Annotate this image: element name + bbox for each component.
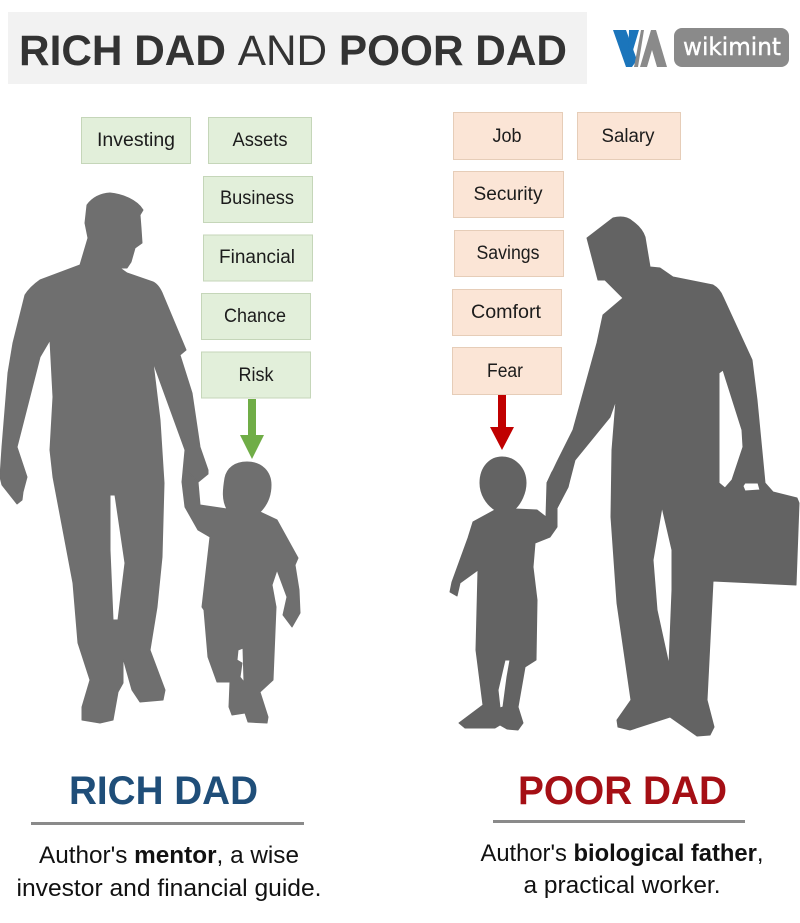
keyword: Salary: Salary <box>602 126 655 147</box>
keyword: Chance <box>202 294 310 340</box>
keyword: Security: Security <box>474 184 543 205</box>
panel: rich dad keywords <box>82 118 312 398</box>
icon: rich dad child silhouette <box>182 462 300 723</box>
panel: rich dad caption <box>16 769 322 902</box>
panel: poor dad caption <box>480 769 763 899</box>
keyword: Business <box>204 176 312 222</box>
icon: poor dad silhouette with briefcase <box>547 217 799 736</box>
arrow: red down <box>490 395 514 450</box>
logo: wikimint: wikimint <box>683 33 781 61</box>
keyword: Comfort: Comfort <box>471 302 542 323</box>
title banner <box>8 12 587 84</box>
keyword: Assets: Assets <box>232 130 288 151</box>
keyword: Savings <box>454 230 564 276</box>
keyword: Savings: Savings <box>476 243 540 264</box>
icon: poor dad child silhouette <box>450 457 573 730</box>
heading: RICH DAD: RICH DAD <box>69 769 258 813</box>
keyword: Financial <box>204 235 312 281</box>
description: investor and financial guide. <box>16 875 322 902</box>
keyword: Job: Job <box>492 126 522 147</box>
title banner: RICH DAD AND POOR DAD <box>19 27 567 75</box>
keyword: Salary <box>578 112 680 160</box>
panel: poor dad keywords <box>452 112 680 394</box>
keyword: Fear: Fear <box>487 361 524 382</box>
icon: rich dad silhouette <box>0 193 208 723</box>
divider line <box>493 820 745 823</box>
keyword: Investing <box>82 118 190 164</box>
description: Author's biological father, <box>480 840 764 867</box>
heading: POOR DAD: POOR DAD <box>518 769 727 813</box>
keyword: Security <box>454 172 564 218</box>
logo: wikimint <box>613 28 789 67</box>
arrow: green down <box>240 399 264 459</box>
keyword: Business: Business <box>220 188 294 209</box>
keyword: Investing: Investing <box>97 130 175 151</box>
description: Author's mentor, a wise <box>39 842 298 869</box>
keyword: Risk <box>202 352 310 398</box>
divider line <box>31 822 304 825</box>
keyword: Job <box>454 112 562 160</box>
keyword: Chance: Chance <box>224 306 286 327</box>
keyword: Comfort <box>452 290 562 336</box>
keyword: Risk: Risk <box>238 365 274 386</box>
keyword: Assets <box>208 118 312 164</box>
description: a practical worker. <box>524 872 720 899</box>
keyword: Fear <box>452 348 562 394</box>
keyword: Financial: Financial <box>219 247 295 268</box>
